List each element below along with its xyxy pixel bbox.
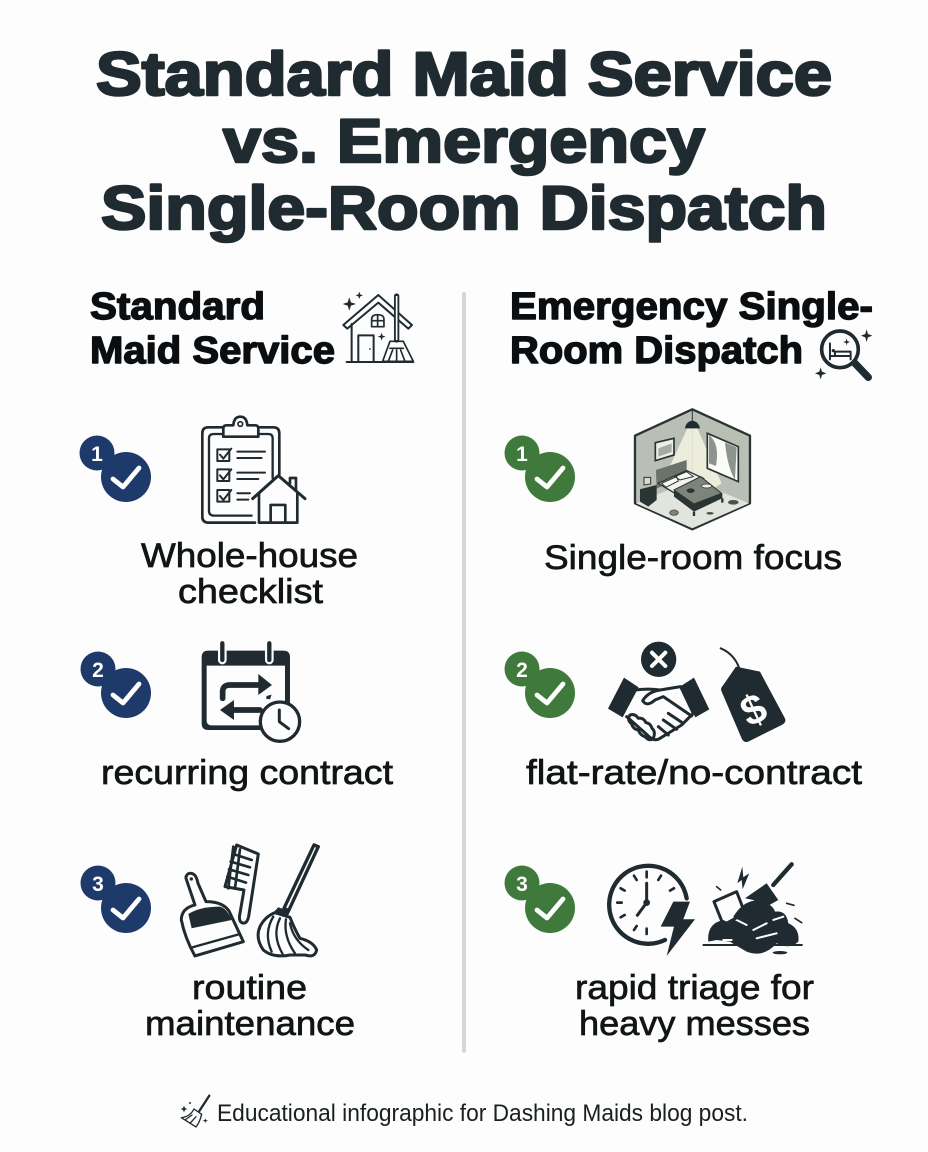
heading: standard maid service: Standard: [90, 286, 265, 328]
footer: [181, 1096, 748, 1127]
item 1: whole-house checklist: [80, 417, 358, 611]
item 3: routine maintenance: [80, 845, 355, 1043]
panel: standard maid service: [80, 286, 413, 1043]
icon: isometric bedroom: [635, 409, 750, 529]
label: [145, 969, 355, 1043]
icon: house and broom: [343, 292, 413, 362]
badge 1: 1: [91, 443, 103, 466]
badge 2: [504, 652, 575, 718]
footer text: Educational infographic for Dashing Maids blog post.: [217, 1100, 748, 1127]
badge 3: [504, 866, 575, 933]
label: Whole-house: [141, 537, 358, 575]
badge 2: 2: [92, 659, 104, 682]
item 2: recurring contract: [80, 643, 394, 792]
icon: handshake with x and price tag: [608, 642, 785, 742]
icon: calendar with clock: [202, 643, 300, 741]
icon: small broom: [181, 1096, 209, 1127]
badge 3: [80, 866, 151, 933]
icon: heavy mess pile: [703, 864, 803, 954]
item 3: rapid triage: [504, 864, 814, 1043]
label: [575, 969, 814, 1043]
label: maintenance: [145, 1005, 355, 1043]
badge 2: 2: [516, 659, 528, 682]
title: Standard Maid Service: [96, 40, 832, 108]
panel: emergency single-room dispatch: [504, 286, 873, 1043]
title: Single-Room Dispatch: [101, 174, 827, 242]
icon: handshake with x and price tag: $: [733, 683, 774, 736]
badge 3: 3: [92, 873, 104, 896]
badge 1: 1: [516, 443, 528, 466]
heading: emergency single-room dispatch: [510, 286, 873, 372]
item 1: single-room focus: [504, 409, 842, 577]
label: routine: [192, 969, 307, 1007]
label: rapid triage for: [575, 969, 814, 1007]
badge 1: [504, 436, 575, 502]
badge 1: [80, 436, 151, 502]
item 2: flat-rate / no-contract: [504, 642, 863, 792]
label: checklist: [178, 573, 324, 611]
heading: emergency single-room dispatch: Emergency Single-: [510, 286, 873, 328]
badge 2: [80, 652, 151, 718]
label: [141, 537, 358, 611]
icon: clipboard with house: [202, 417, 305, 523]
icon: magnifier over bed: [815, 329, 872, 379]
title: vs. Emergency: [223, 107, 705, 175]
heading: standard maid service: [90, 286, 335, 372]
heading: standard maid service: Maid Service: [90, 330, 335, 372]
label: recurring contract: [101, 754, 394, 792]
vertical divider: [462, 292, 466, 1053]
heading: emergency single-room dispatch: Room Dispatch: [510, 330, 803, 372]
label: flat-rate/no-contract: [526, 754, 863, 792]
title: [96, 40, 832, 242]
badge 3: 3: [516, 873, 528, 896]
label: Single-room focus: [544, 539, 842, 577]
icon: clock with lightning: [609, 866, 695, 956]
label: heavy messes: [579, 1005, 810, 1043]
icon: dustpan, brush and mop: [181, 845, 318, 956]
